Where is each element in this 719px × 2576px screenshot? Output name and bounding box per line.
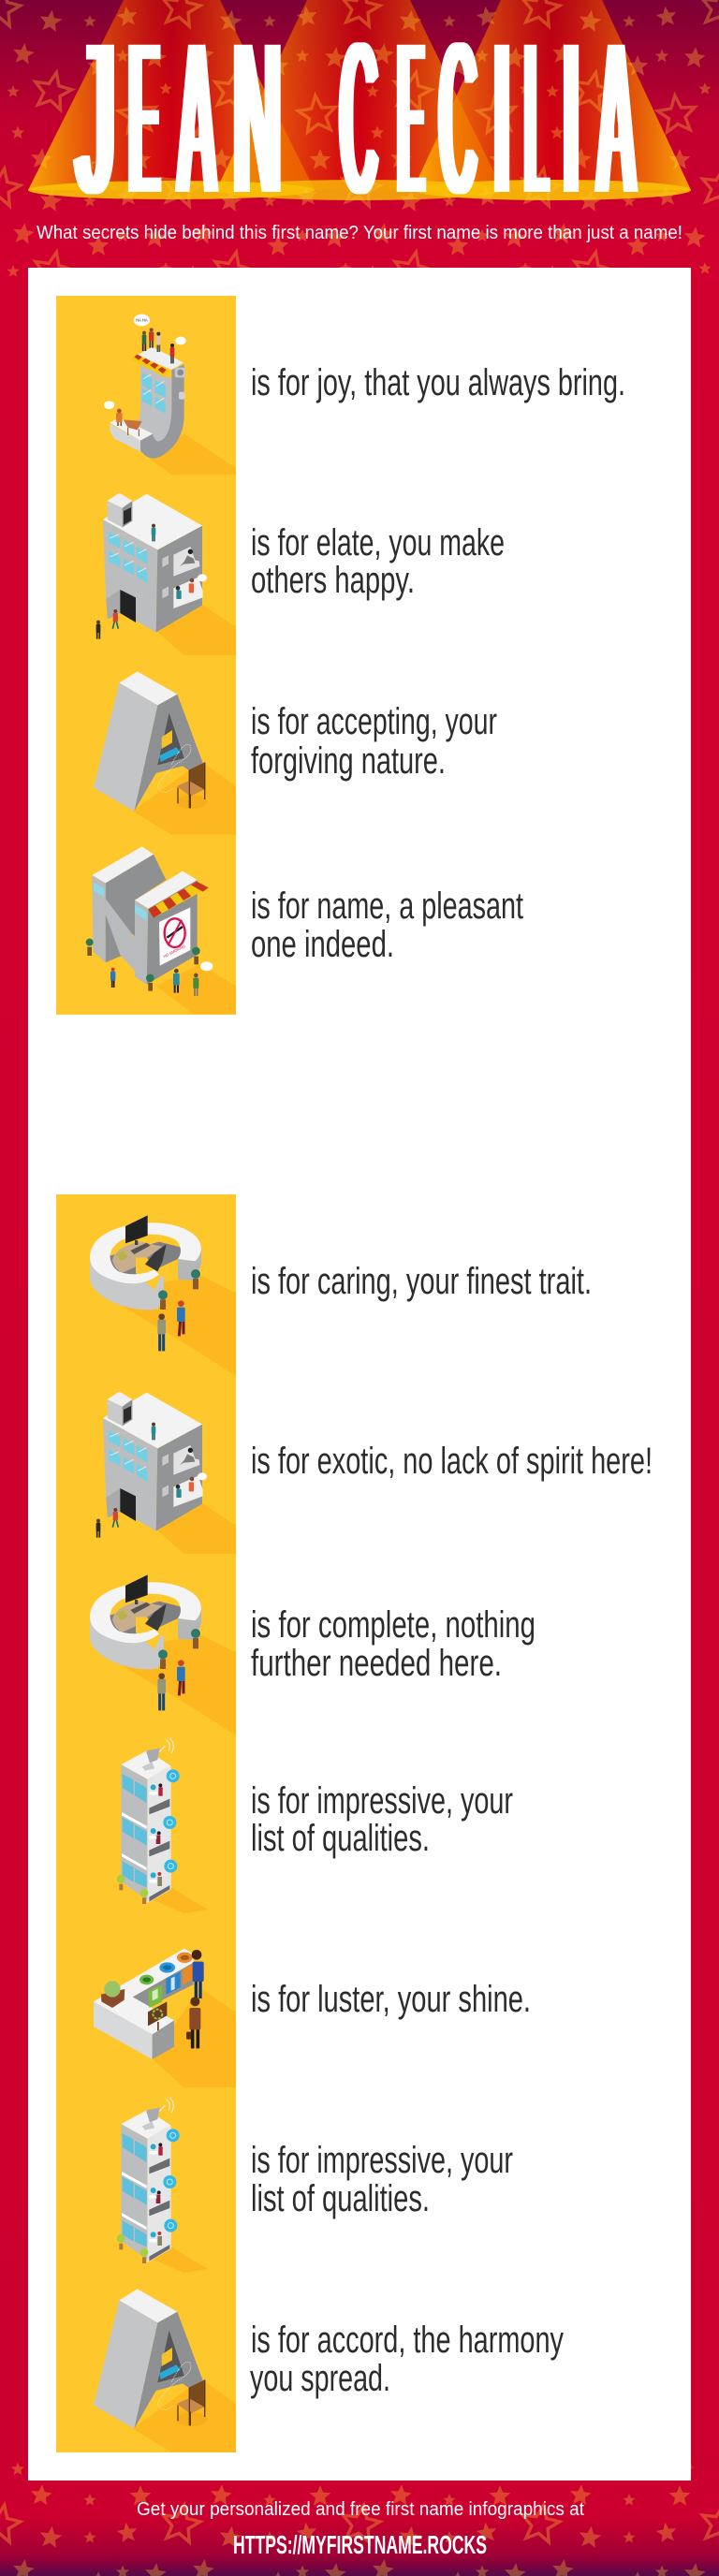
illustration: letter L recycling counter bbox=[94, 1949, 236, 2087]
row: I bbox=[117, 1738, 513, 1913]
text: E lines: is for elate, you make bbox=[251, 522, 505, 564]
text: N lines bbox=[251, 886, 523, 965]
illustration: letter E building second bbox=[96, 1392, 236, 1554]
row: A bbox=[94, 671, 497, 835]
illustration: letter N building bbox=[86, 846, 236, 1014]
subtitle: What secrets hide behind this first name? Your first name is more than just a name! bbox=[37, 223, 682, 243]
illustration: letter J building bbox=[104, 315, 236, 475]
footer star pattern bbox=[0, 2462, 719, 2576]
row: E bbox=[96, 493, 505, 655]
illustration: letter C reception desk second bbox=[90, 1574, 236, 1735]
text: I lines second: list of qualities. bbox=[251, 2178, 430, 2219]
text: N lines: is for name, a pleasant bbox=[251, 886, 523, 927]
illustration: letter I tower bbox=[117, 1738, 208, 1913]
text: C lines second: further needed here. bbox=[251, 1643, 502, 1684]
text: I lines: list of qualities. bbox=[251, 1818, 430, 1859]
row: C second bbox=[90, 1574, 536, 1735]
row: A second bbox=[94, 2289, 564, 2452]
text: I lines bbox=[251, 1780, 513, 1859]
text: A lines: forgiving nature. bbox=[251, 740, 446, 782]
row: I second bbox=[117, 2098, 513, 2273]
text: I lines second: is for impressive, your bbox=[251, 2140, 513, 2181]
text: E lines: others happy. bbox=[251, 560, 415, 601]
illustration: letter A building bbox=[94, 671, 236, 835]
row: L bbox=[94, 1949, 531, 2087]
header bbox=[0, 0, 719, 283]
illustration: letter A building second bbox=[94, 2289, 236, 2452]
text: C line: is for caring, your finest trait. bbox=[251, 1261, 592, 1302]
yellow strip: first name bbox=[56, 296, 236, 1015]
text: L line: is for luster, your shine. bbox=[251, 1979, 531, 2020]
text: I lines: is for impressive, your bbox=[251, 1780, 513, 1822]
spotlights bbox=[28, 0, 691, 200]
star pattern header bbox=[0, 0, 719, 283]
footer line: Get your personalized and free first name infographics at bbox=[137, 2499, 584, 2520]
row: N bbox=[86, 846, 523, 1014]
text: I lines second bbox=[251, 2140, 513, 2219]
text: A lines second: is for accord, the harmony bbox=[251, 2320, 564, 2361]
white content panel bbox=[28, 268, 691, 2481]
text: C lines second bbox=[251, 1604, 536, 1684]
yellow strip: second name bbox=[56, 1194, 236, 2452]
illustration: letter C reception desk bbox=[90, 1215, 236, 1376]
text: C lines second: is for complete, nothing bbox=[251, 1604, 536, 1646]
row: J bbox=[104, 315, 625, 475]
text: A lines bbox=[251, 701, 497, 782]
footer text bbox=[137, 2499, 584, 2559]
text: A lines: is for accepting, your bbox=[251, 701, 497, 742]
text: N lines: one indeed. bbox=[251, 924, 394, 965]
text: A lines second bbox=[250, 2320, 564, 2399]
text: E lines bbox=[251, 522, 505, 601]
title bbox=[75, 0, 637, 247]
row: E second bbox=[96, 1392, 653, 1554]
row: C bbox=[90, 1215, 592, 1376]
text: A lines second: you spread. bbox=[250, 2358, 390, 2399]
footer url: HTTPS://MYFIRSTNAME.ROCKS bbox=[233, 2530, 487, 2559]
illustration: letter I tower second bbox=[117, 2098, 208, 2273]
illustration: letter E building bbox=[96, 493, 236, 655]
